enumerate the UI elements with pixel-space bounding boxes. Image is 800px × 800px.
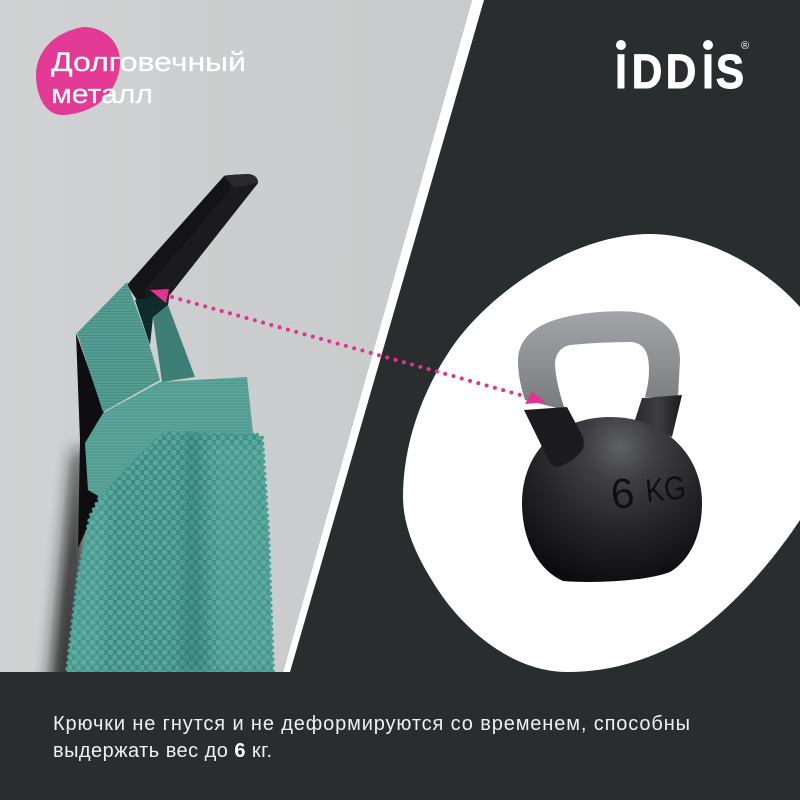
towel loop front strip (77, 282, 160, 412)
handle (518, 311, 680, 410)
arrowhead left (150, 289, 169, 303)
logo: IDDIS (615, 40, 749, 99)
ball (522, 417, 702, 582)
hook arm (128, 174, 258, 300)
heading line 2: металл (51, 79, 153, 109)
logo dots (616, 40, 713, 50)
towel top fold (85, 377, 253, 497)
caption line 2: выдержать вес до 6 кг. (53, 740, 272, 762)
dotted double arrow (150, 289, 546, 404)
digit 6: 6 (608, 469, 637, 518)
towel loop back strip (153, 305, 195, 382)
white diagonal stripe (283, 0, 484, 672)
pink blob (36, 27, 120, 115)
wall (0, 0, 480, 672)
dotted line (172, 297, 524, 396)
white circle panel (403, 234, 800, 672)
left sleeve (524, 407, 584, 467)
wall shadow (48, 450, 84, 700)
towel body (60, 377, 275, 672)
arrowhead right (525, 392, 546, 404)
caption (53, 713, 690, 762)
registered mark: ® (741, 40, 749, 52)
panel: wall photo with hook and towel (0, 0, 480, 700)
right sleeve (635, 395, 682, 437)
towel folds and shading (60, 430, 275, 672)
weight label (608, 463, 688, 518)
logo lettering: IDDIS (615, 44, 744, 99)
caption line 1: Крючки не гнутся и не деформируются со временем, способны (53, 713, 690, 735)
towel loop inner shadow (135, 292, 170, 345)
heading (51, 47, 246, 109)
heading line 1: Долговечный (51, 47, 246, 77)
kettlebell (518, 311, 702, 582)
hook back plate (76, 333, 105, 548)
unit KG: KG (644, 468, 687, 509)
